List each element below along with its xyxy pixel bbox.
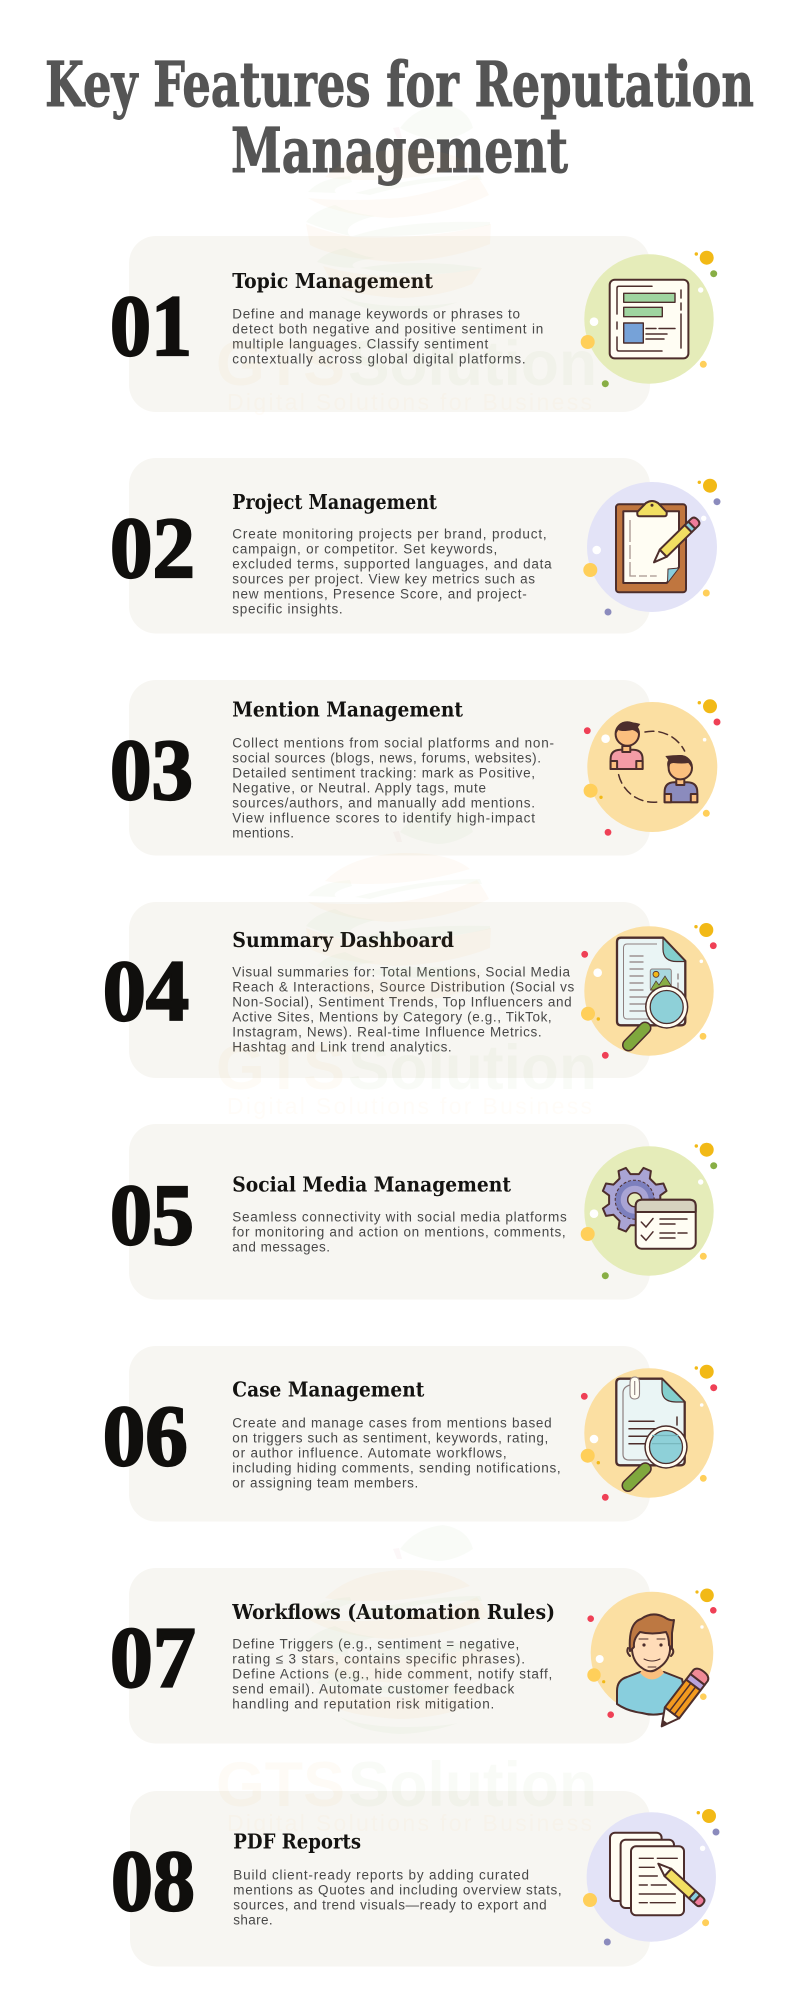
body text xyxy=(233,1867,562,1927)
icon: two people connected on orange circle xyxy=(584,699,720,836)
watermark: GTSSolution logo bottom: GTS xyxy=(216,1750,345,1820)
body text: handling and reputation risk mitigation. xyxy=(232,1696,494,1711)
icon: news document on green circle xyxy=(581,251,717,387)
number 03: 03 xyxy=(110,721,193,818)
watermark: GTSSolution logo bottom xyxy=(216,1525,597,1836)
body text: Define Triggers (e.g., sentiment = negative, xyxy=(232,1636,519,1651)
body text: new mentions, Presence Score, and project- xyxy=(232,586,527,601)
watermark: GTSSolution logo middle: GTS xyxy=(216,1033,345,1103)
body text: sources/authors, and manually add mentions. xyxy=(232,795,535,810)
body text: campaign, or competitor. Set keywords, xyxy=(232,541,497,556)
number 06: 06 xyxy=(103,1387,188,1484)
panel: 07 Workflows (Automation Rules) xyxy=(110,1568,650,1744)
body text: Detailed sentiment tracking: mark as Positive, xyxy=(232,765,535,780)
body text: for monitoring and action on mentions, comments, xyxy=(232,1225,566,1240)
icon: gear and checklist window on green circle xyxy=(581,1143,717,1279)
body text: Active Sites, Mentions by Category (e.g., TikTok, xyxy=(232,1010,552,1025)
number 05: 05 xyxy=(110,1166,194,1263)
body text: Create monitoring projects per brand, product, xyxy=(232,526,547,541)
body text: or author influence. Automate workflows, xyxy=(232,1445,507,1460)
heading: Project Management: Project Management xyxy=(232,490,437,514)
icon: report with magnifier on orange circle xyxy=(581,923,717,1059)
watermark: GTSSolution logo bottom: Solution xyxy=(348,1750,597,1820)
icon: stacked papers and pencil on lavender circle xyxy=(583,1809,720,1946)
body text: mentions. xyxy=(232,825,294,840)
watermark: GTSSolution logo top xyxy=(216,104,597,415)
body text: contextually across global digital platforms. xyxy=(232,351,526,366)
body text: Define and manage keywords or phrases to xyxy=(232,306,520,321)
panel: 04 Summary Dashboard xyxy=(103,902,650,1078)
body text: send email). Automate customer feedback xyxy=(232,1681,515,1696)
heading: Case Management: Case Management xyxy=(232,1378,425,1402)
body text: sources, and trend visuals—ready to export and xyxy=(233,1897,547,1912)
title xyxy=(45,48,754,187)
body text xyxy=(232,965,575,1055)
watermark: GTSSolution logo top: GTS xyxy=(216,329,345,399)
body text: sources per project. View key metrics such as xyxy=(232,571,535,586)
watermark: GTSSolution logo middle: Digital Solutions for Business xyxy=(227,1093,592,1119)
heading: PDF Reports: PDF Reports xyxy=(233,1830,361,1854)
body text: rating ≤ 3 stars, contains specific phrases). xyxy=(232,1651,525,1666)
panel: 05 Social Media Management xyxy=(110,1124,650,1300)
heading: Workflows (Automation Rules): Workflows (Automation Rules) xyxy=(231,1600,555,1624)
body text xyxy=(232,735,554,840)
body text: and messages. xyxy=(232,1240,330,1255)
icon: man with pencil on orange circle xyxy=(587,1588,717,1732)
body text xyxy=(232,526,552,616)
body text: or assigning team members. xyxy=(232,1475,418,1490)
body text xyxy=(232,1210,567,1255)
body text: Instagram, News). Real-time Influence Metrics. xyxy=(232,1025,542,1040)
body text xyxy=(232,1636,552,1711)
heading: Summary Dashboard: Summary Dashboard xyxy=(232,928,454,952)
panel: 03 Mention Management xyxy=(110,680,650,856)
body text: Hashtag and Link trend analytics. xyxy=(232,1040,452,1055)
heading: Social Media Management: Social Media Management xyxy=(232,1173,511,1197)
body text: Seamless connectivity with social media platforms xyxy=(232,1210,567,1225)
body text: Visual summaries for: Total Mentions, Social Media xyxy=(232,965,570,980)
body text: View influence scores to identify high-impact xyxy=(232,810,535,825)
body text: specific insights. xyxy=(232,601,343,616)
body text xyxy=(232,306,543,366)
watermark: GTSSolution logo bottom: Digital Solutions for Business xyxy=(227,1810,592,1836)
body text: excluded terms, supported languages, and data xyxy=(232,556,552,571)
body text: including hiding comments, sending notifications, xyxy=(232,1460,561,1475)
body text: Build client-ready reports by adding curated xyxy=(233,1867,529,1882)
body text: detect both negative and positive sentiment in xyxy=(232,321,543,336)
body text: Collect mentions from social platforms and non- xyxy=(232,735,554,750)
body text: mentions as Quotes and including overview stats, xyxy=(233,1882,562,1897)
body text xyxy=(232,1415,561,1490)
number 02: 02 xyxy=(110,499,195,596)
body text: Non-Social), Sentiment Trends, Top Influencers and xyxy=(232,995,572,1010)
body text: share. xyxy=(233,1912,273,1927)
panel: 08 PDF Reports xyxy=(111,1791,650,1966)
body text: Reach & Interactions, Source Distribution (Social vs xyxy=(232,980,575,995)
panel: 01 Topic Management xyxy=(110,236,650,412)
number 07: 07 xyxy=(110,1609,196,1706)
body text: social sources (blogs, news, forums, websites). xyxy=(232,750,541,765)
icon: clipboard and pencil on lavender circle xyxy=(583,479,720,616)
watermark: GTSSolution logo top: Solution xyxy=(348,329,597,399)
number 08: 08 xyxy=(111,1832,195,1929)
panel: 02 Project Management xyxy=(110,458,650,634)
body text: on triggers such as sentiment, keywords, rating, xyxy=(232,1430,548,1445)
watermark: GTSSolution logo top: Digital Solutions for Business xyxy=(227,389,592,415)
icon: clipped document with magnifier on orange circle xyxy=(581,1365,717,1501)
panel: 06 Case Management xyxy=(103,1346,650,1522)
number 04: 04 xyxy=(103,942,189,1039)
heading: Mention Management: Mention Management xyxy=(232,698,463,722)
watermark: GTSSolution logo middle xyxy=(216,808,597,1119)
body text: Negative, or Neutral. Apply tags, mute xyxy=(232,780,486,795)
heading: Topic Management: Topic Management xyxy=(232,269,433,293)
body text: multiple languages. Classify sentiment xyxy=(232,336,489,351)
watermark: GTSSolution logo middle: Solution xyxy=(348,1033,597,1103)
body text: Define Actions (e.g., hide comment, notify staff, xyxy=(232,1666,552,1681)
number 01: 01 xyxy=(110,277,192,374)
body text: Create and manage cases from mentions based xyxy=(232,1415,552,1430)
title: Management xyxy=(231,114,568,187)
